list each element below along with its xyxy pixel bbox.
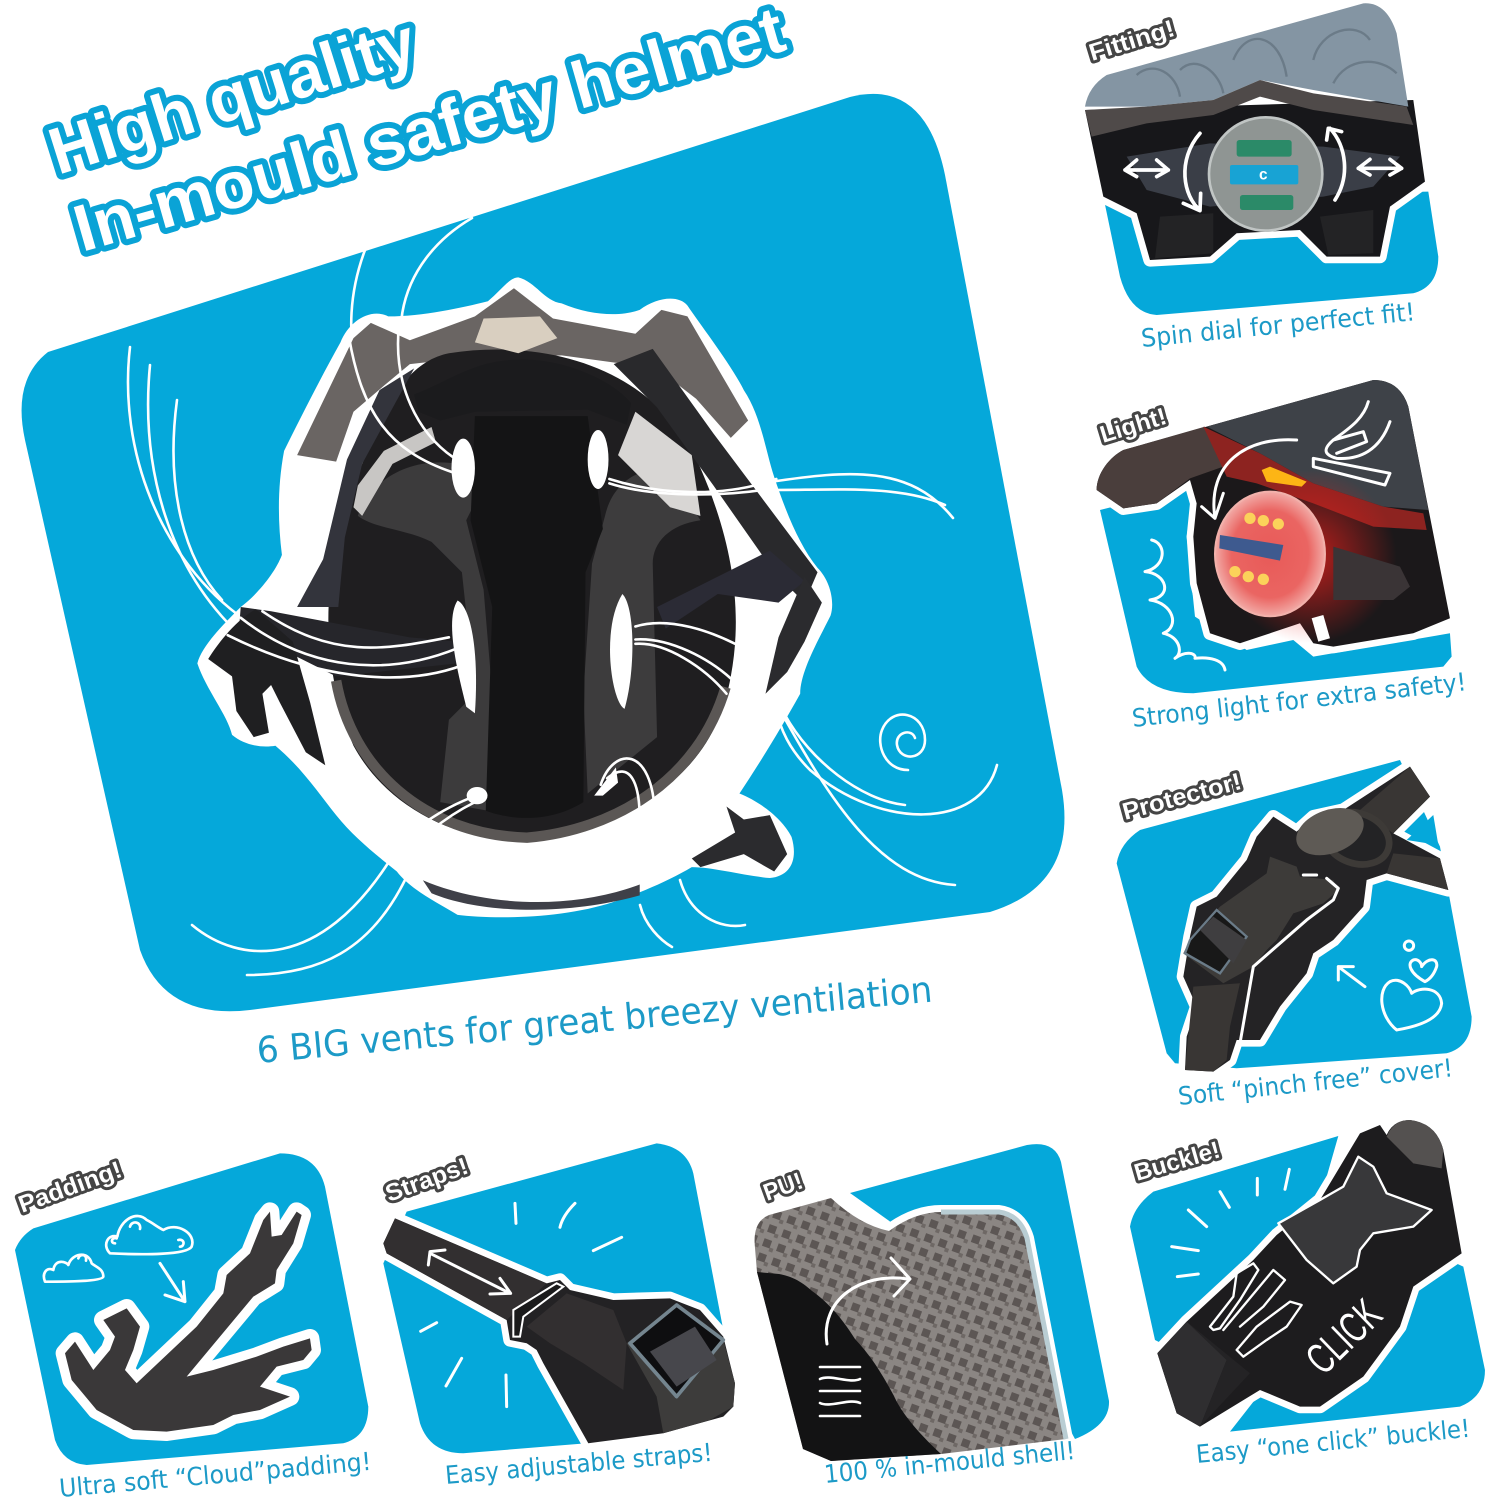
sound squiggle	[1145, 540, 1225, 670]
caption: fitting: Spin dial for perfect fit!	[1140, 297, 1416, 353]
panel: buckle	[1130, 1120, 1485, 1432]
grey shell	[1207, 380, 1428, 510]
tag: pu: PU!	[760, 1168, 807, 1207]
blue base	[1103, 192, 1438, 315]
clear edge	[941, 1212, 1066, 1439]
back dial strip	[475, 316, 557, 353]
panel: fitting	[1085, 3, 1438, 315]
caption: pu: 100 % in-mould shell!	[823, 1436, 1076, 1489]
caption: light: Strong light for extra safety!	[1130, 667, 1468, 733]
slider	[1185, 910, 1247, 973]
foam rim	[1085, 80, 1413, 137]
blue base	[15, 1153, 368, 1465]
tag: protector: Protector!	[1120, 768, 1244, 826]
vents	[451, 430, 632, 804]
blue base	[850, 1144, 1109, 1439]
finger press icon	[1313, 402, 1390, 485]
right buckle	[765, 577, 822, 694]
blue base	[1117, 760, 1472, 1068]
helmet interior	[328, 350, 736, 841]
labels	[353, 427, 436, 516]
panel: protector	[1117, 760, 1472, 1072]
tag: padding: Padding!	[15, 1156, 126, 1219]
caption: protector: Soft “pinch free” cover!	[1177, 1053, 1454, 1111]
strap loop	[513, 1283, 563, 1337]
red glow	[1223, 470, 1397, 643]
caption: straps: Easy adjustable straps!	[444, 1438, 714, 1490]
lower straps	[1155, 210, 1373, 258]
foam icon	[820, 1367, 860, 1416]
headband strap	[614, 349, 818, 603]
grey shell	[1085, 3, 1408, 107]
tag: light: Light!	[1097, 403, 1170, 449]
buckle	[1183, 857, 1338, 983]
lower buckle	[692, 806, 787, 872]
tag: straps: Straps!	[382, 1153, 472, 1208]
bubble	[1404, 941, 1414, 950]
sparks	[421, 1203, 622, 1407]
padding shape	[65, 1212, 312, 1432]
black strap cover	[1157, 1120, 1462, 1427]
foam shell	[755, 1198, 1066, 1461]
tag: fitting: Fitting!	[1086, 15, 1178, 67]
neck pad	[414, 360, 631, 425]
sparks	[1172, 1169, 1289, 1277]
dial	[1209, 117, 1322, 231]
panel: in-mould shell	[755, 1144, 1109, 1461]
dark corner	[757, 1272, 941, 1461]
blue base	[1100, 487, 1452, 693]
caption: buckle: Easy “one click” buckle!	[1195, 1414, 1471, 1469]
buckle clip outlines	[1210, 1263, 1302, 1357]
panel: light	[1097, 380, 1452, 693]
foam shell top	[297, 288, 748, 462]
pointer arrow	[1338, 967, 1365, 987]
webbing straps	[1360, 767, 1448, 890]
dark photo	[1097, 380, 1450, 647]
chevron plate	[1333, 547, 1410, 600]
shell scales	[1137, 30, 1397, 97]
snap button	[1290, 799, 1370, 864]
blue triangle	[1407, 815, 1438, 845]
panel: straps	[383, 1143, 735, 1453]
foam side pads	[358, 462, 492, 811]
tag: buckle: Buckle!	[1131, 1137, 1223, 1187]
clouds	[44, 1216, 192, 1282]
bottom shell edge	[423, 880, 640, 910]
curved arrow	[826, 1258, 910, 1344]
title: High quality	[40, 3, 425, 188]
snap ring	[1317, 803, 1397, 873]
title: In-mould safety helmet	[65, 0, 792, 265]
dial: c	[1259, 166, 1268, 183]
bottom shell rim	[336, 681, 726, 838]
curved arrow	[1202, 440, 1297, 518]
slider buckle	[627, 1303, 735, 1433]
webbing end	[1157, 1322, 1227, 1427]
airflow lines over helmet	[228, 325, 776, 830]
helmet white outline	[197, 277, 832, 917]
left buckle	[208, 609, 325, 765]
center pad	[471, 416, 603, 818]
strap webbing	[383, 1218, 627, 1390]
soft cover	[1183, 767, 1448, 1072]
dark photo body	[1085, 100, 1425, 260]
amber reflection	[1262, 467, 1307, 487]
hearts	[1382, 960, 1442, 1030]
airflow lines	[128, 218, 997, 975]
helmet photo	[197, 277, 832, 917]
buckle top	[1278, 1157, 1432, 1283]
main caption: 6 BIG vents for great breezy ventilation	[255, 970, 934, 1072]
double arrow	[428, 1250, 511, 1294]
foam left	[1097, 427, 1223, 508]
blue base	[1130, 1136, 1485, 1432]
arrows	[1125, 128, 1402, 211]
lens	[1215, 492, 1325, 616]
strap mid band	[1127, 143, 1400, 207]
strap and pouch	[383, 1218, 735, 1443]
click text: CLICK	[1297, 1290, 1391, 1384]
main blue panel	[22, 94, 1064, 1011]
red foam band	[1203, 427, 1427, 530]
panel: padding	[15, 1153, 368, 1465]
arrow	[160, 1263, 185, 1302]
snap button	[1387, 1120, 1443, 1168]
blue base	[383, 1143, 723, 1453]
bracket window	[1312, 615, 1330, 642]
buckle outline	[1240, 875, 1338, 1043]
